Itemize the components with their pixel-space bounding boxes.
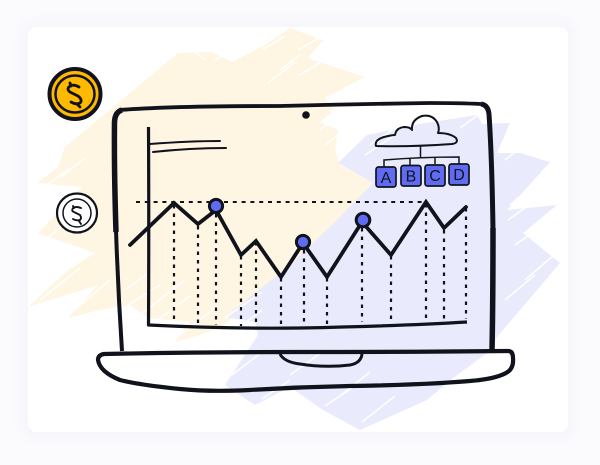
dotted drop lines <box>174 204 466 326</box>
laptop <box>98 103 513 391</box>
line series <box>130 202 466 277</box>
legend strokes <box>150 141 226 152</box>
cloud hierarchy <box>376 116 469 187</box>
box A: A <box>381 170 392 187</box>
box D: D <box>453 167 465 184</box>
axes <box>148 127 467 328</box>
data point 1 <box>209 199 223 213</box>
camera dot <box>302 111 310 119</box>
box B: B <box>406 168 416 186</box>
dashed target line <box>136 201 426 203</box>
connector lines <box>384 146 459 167</box>
chart <box>130 127 467 328</box>
yellow brush blob <box>28 28 373 342</box>
lavender brush blob <box>225 110 560 430</box>
laptop base <box>98 351 513 391</box>
silver coin icon <box>57 194 97 232</box>
data point 3 <box>356 213 370 227</box>
laptop screen lid <box>114 103 493 351</box>
cloud icon <box>376 116 457 146</box>
trackpad notch <box>280 354 362 366</box>
data point 2 <box>296 235 310 249</box>
gold coin icon <box>50 69 100 119</box>
box C: C <box>429 168 441 185</box>
